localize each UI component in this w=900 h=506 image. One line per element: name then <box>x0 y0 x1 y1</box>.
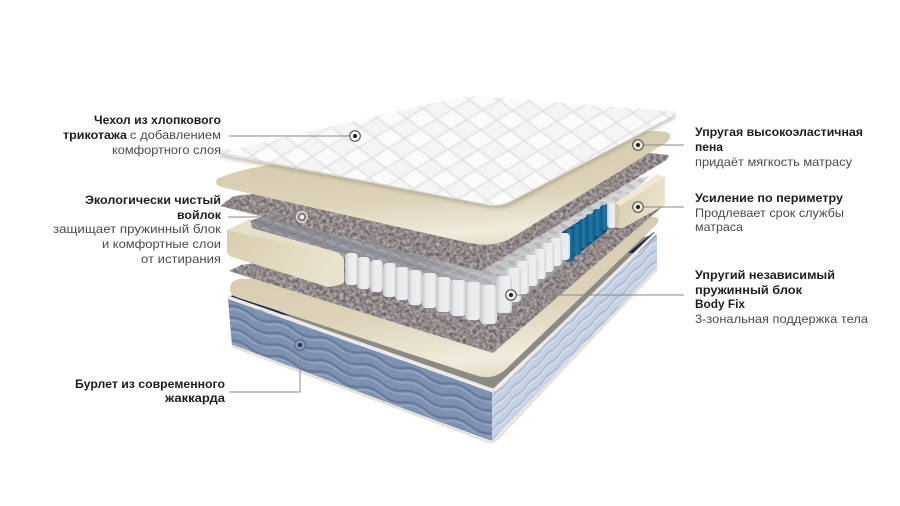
text: cover <box>63 113 221 157</box>
text: springs: 3-зональная поддержка тела <box>695 312 868 326</box>
text: felt: и комфортные слои <box>102 237 221 251</box>
upper felt layer <box>220 152 669 271</box>
text: perimeter: матраса <box>695 220 743 234</box>
text: springs: Body Fix <box>695 297 745 311</box>
perimeter foam: right block <box>615 174 665 228</box>
text: cover: Чехол из хлопкового <box>94 113 221 127</box>
text: jacquard: жаккарда <box>164 391 225 405</box>
quilted cover <box>218 96 677 210</box>
lower foam layer <box>230 216 658 377</box>
springs: backing <box>345 238 568 318</box>
text: felt <box>53 193 222 266</box>
text: perimeter: Продлевает срок службы <box>695 206 844 220</box>
lower felt layer <box>229 205 662 353</box>
springs: front row <box>345 253 497 324</box>
text: foam: Упругая высокоэластичная <box>695 125 863 139</box>
leader: felt <box>228 212 307 222</box>
text: felt: защищает пружинный блок <box>53 222 222 236</box>
text: foam <box>695 125 863 169</box>
base: dark rear corner <box>230 232 657 316</box>
springs: blue zone <box>562 204 609 262</box>
base: inner foam fill <box>232 234 656 390</box>
cover: quilted surface <box>221 96 674 205</box>
mattress base <box>228 232 657 442</box>
text: perimeter <box>695 191 844 234</box>
leader: jacquard <box>229 340 305 392</box>
text: springs: Упругий независимый <box>695 268 835 282</box>
spring block <box>227 174 665 324</box>
text: springs: пружинный блок <box>695 283 803 297</box>
upper foam layer <box>216 131 670 245</box>
text: foam: пена <box>695 140 723 154</box>
text: springs <box>695 268 868 326</box>
cover: shadow edge <box>221 115 674 206</box>
text: felt: от истирания <box>141 252 221 266</box>
text: felt: Экологически чистый <box>85 193 221 207</box>
text: perimeter: Усиление по периметру <box>695 191 843 205</box>
base: bottom piping <box>232 269 657 442</box>
leader: springs <box>506 290 684 300</box>
leader: cover <box>229 131 360 141</box>
base: front jacquard side <box>228 299 492 441</box>
leader: perimeter <box>633 202 684 212</box>
text: jacquard <box>75 377 225 405</box>
text: cover: с добавлением <box>130 128 221 142</box>
text: cover: трикотажа <box>63 128 127 142</box>
springs: side row <box>496 203 616 313</box>
text: jacquard: Бурлет из современного <box>75 377 225 391</box>
text: cover: комфортного слоя <box>112 143 221 157</box>
perimeter foam: left block <box>227 219 344 287</box>
text: felt: войлок <box>177 208 222 222</box>
base: top piping <box>228 233 656 390</box>
text: foam: придаёт мягкость матрасу <box>695 155 852 169</box>
base: right jacquard side <box>492 235 657 441</box>
leader: foam <box>633 140 684 150</box>
cover: rim <box>221 117 672 206</box>
springs: top surface <box>246 176 650 290</box>
